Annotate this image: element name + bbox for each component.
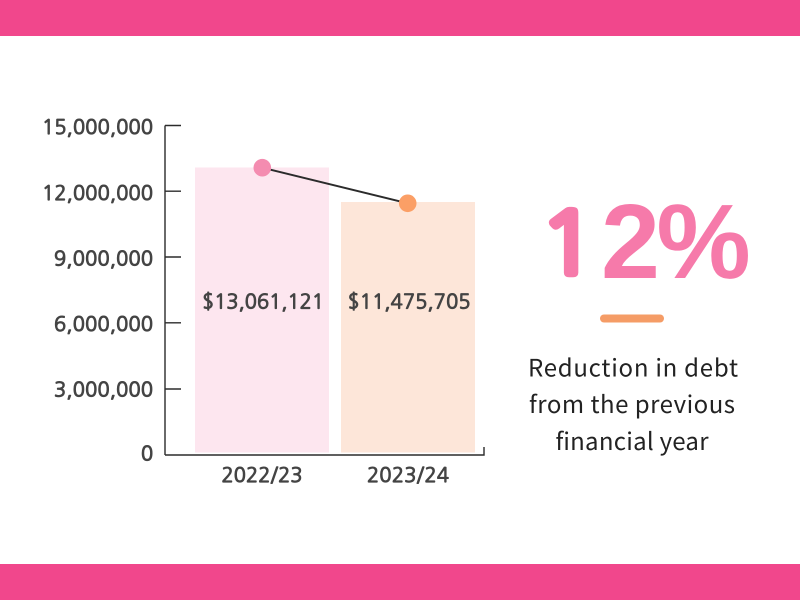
- x axis labels: [222, 465, 449, 485]
- big percentage: 1: [539, 202, 597, 286]
- top banner: [0, 0, 800, 36]
- big percentage: 2%: [601, 183, 751, 301]
- bar: 2022/23: [195, 168, 329, 452]
- point: 2023/24: [399, 194, 417, 212]
- y axis labels: 6,000,000: [54, 314, 153, 334]
- axes: [165, 126, 484, 455]
- divider: [600, 314, 664, 322]
- bar value labels: $13,061,121: [202, 291, 324, 311]
- trend line: [262, 168, 408, 203]
- description: financial year: [556, 422, 709, 457]
- x axis labels: 2022/23: [222, 465, 302, 485]
- y axis labels: 3,000,000: [54, 380, 153, 400]
- bar value labels: [202, 291, 470, 311]
- bar: 2023/24: [341, 202, 475, 452]
- y axis labels: 0: [141, 444, 153, 464]
- y axis labels: 15,000,000: [42, 117, 153, 137]
- y axis labels: 9,000,000: [54, 248, 153, 268]
- description: from the previous: [529, 385, 735, 420]
- description: Reduction in debt: [528, 349, 738, 384]
- point: 2022/23: [253, 159, 271, 176]
- description: [528, 349, 738, 457]
- y axis labels: 12,000,000: [42, 183, 153, 203]
- y axis labels: [42, 117, 153, 464]
- x axis labels: 2023/24: [367, 465, 449, 485]
- bar value labels: $11,475,705: [348, 291, 470, 311]
- bottom banner: [0, 564, 800, 600]
- bar chart: [42, 117, 484, 485]
